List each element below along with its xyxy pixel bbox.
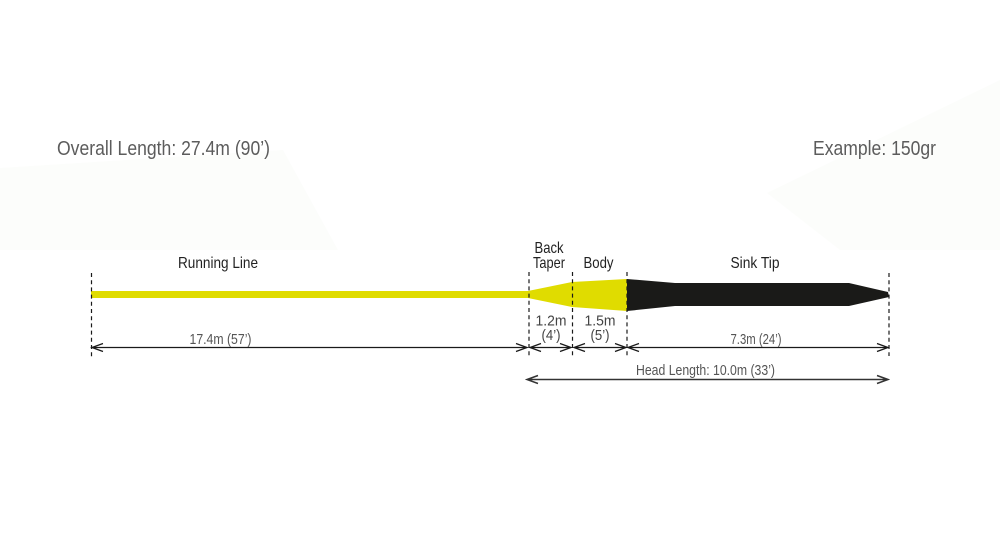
dimension: head length: Head Length: 10.0m (33’) [636,363,775,379]
dimension: sink tip: 7.3m (24’) [730,332,782,348]
running line [91,291,529,298]
body [572,279,627,311]
dimension: back taper metres: 1.2m [536,312,566,330]
label: sink tip: Sink Tip [730,255,780,272]
arrow: body length [574,344,626,352]
fly line profile [91,279,889,311]
heading: overall length: Overall Length: 27.4m (90’) [57,137,270,160]
section labels [178,240,780,272]
dimension labels [190,312,782,379]
dimension: body feet: (5’) [590,327,610,344]
label: body: Body [584,255,614,272]
heading: example weight: Example: 150gr [813,137,936,160]
dimension: running line: 17.4m (57’) [190,332,252,348]
label: back taper: Back [534,240,564,257]
arrow: running line length [92,344,527,352]
dimension: back taper feet: (4’) [542,327,560,344]
label: taper: Taper [533,255,566,272]
arrow: sink tip length [628,344,888,352]
background shape: right [767,80,1000,250]
dimension arrows [92,344,888,384]
sink tip [627,279,889,311]
label: running line: Running Line [178,255,258,272]
background shape: left [0,150,338,250]
dashed guide lines [92,272,889,358]
arrow: back taper length [530,344,571,352]
arrow: head length [527,376,888,384]
back taper [528,282,572,307]
dimension: body metres: 1.5m [584,312,616,330]
